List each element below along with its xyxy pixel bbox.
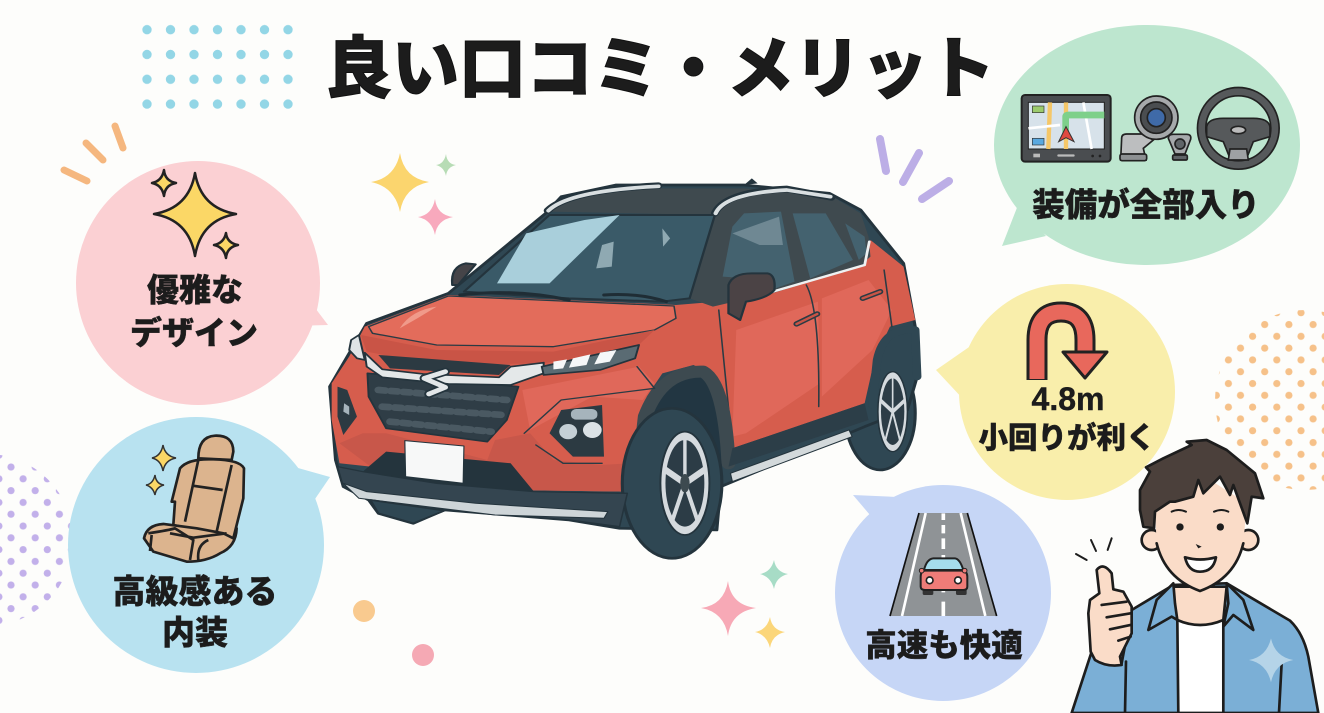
label: full equipment: 装備が全部入り	[1032, 186, 1260, 223]
jacket	[1072, 583, 1318, 713]
chest sparkle	[1249, 638, 1293, 682]
front rim	[660, 432, 709, 535]
hair	[1140, 440, 1263, 528]
jacket seams	[1125, 662, 1282, 713]
lower grille	[363, 452, 534, 492]
body highlights	[522, 280, 892, 437]
title: 良い口コミ・メリット	[325, 32, 995, 107]
front tyre	[622, 408, 722, 558]
panel: full equipment	[994, 25, 1300, 265]
sill	[728, 403, 869, 467]
emblem	[424, 372, 445, 394]
icon: U-turn arrow	[1037, 312, 1107, 380]
decorative dot: pink	[412, 644, 434, 666]
eyes	[1176, 523, 1224, 548]
eyebrows	[1172, 510, 1228, 512]
sparkles around car top	[371, 153, 456, 235]
burst lines: orange	[64, 126, 123, 181]
label: elegant design: 優雅な	[147, 272, 243, 308]
panel: tight turning	[936, 284, 1175, 500]
icon: gold sparkles	[152, 170, 238, 258]
collar	[1148, 583, 1177, 630]
label: elegant design: デザイン	[130, 315, 258, 351]
front bumper contour	[524, 367, 655, 463]
icon: small sparkles	[146, 445, 176, 495]
side windows	[723, 212, 795, 288]
decorative dot: orange	[353, 600, 375, 622]
mirrors	[452, 263, 476, 285]
upper grille slot	[378, 355, 511, 375]
label: luxurious interior: 高級感ある	[112, 573, 278, 610]
dot pattern: purple	[0, 454, 73, 626]
roof rails	[548, 186, 832, 213]
rear tyre	[845, 357, 915, 470]
lower bumper shade	[339, 433, 631, 492]
icon: dash camera	[1120, 96, 1191, 161]
ears	[1142, 530, 1162, 550]
face	[1155, 473, 1247, 591]
door lines and handles	[719, 270, 892, 447]
panel: elegant design	[76, 161, 328, 405]
wipers	[460, 293, 666, 302]
icon: steering wheel	[1202, 92, 1275, 165]
label: turning radius: 小回りが利く	[978, 421, 1156, 455]
chrome belt line	[758, 242, 869, 296]
icon: road with car	[890, 513, 997, 616]
burst lines: purple	[880, 139, 949, 199]
person giving thumbs up	[1072, 440, 1318, 713]
front left tyre	[371, 500, 444, 523]
spark marks	[1076, 538, 1112, 560]
icon: car seat	[144, 436, 244, 562]
headlight	[542, 345, 639, 375]
main grille	[367, 373, 518, 442]
dot pattern: orange	[1215, 310, 1324, 490]
label: turning radius: 4.8m	[1032, 381, 1104, 417]
left fog lamp	[338, 387, 357, 435]
licence plate	[405, 441, 464, 483]
hood lower red band	[361, 330, 655, 365]
chrome headlight bar and left lamp	[349, 335, 365, 360]
label: luxurious interior: 内装	[162, 614, 228, 651]
body silhouette	[330, 185, 919, 530]
fog lamp pod	[550, 405, 604, 457]
rear rim	[878, 372, 907, 452]
front wheel arch	[637, 372, 728, 487]
lower bumper	[338, 467, 627, 527]
label: comfortable highway: 高速も快適	[865, 627, 1023, 663]
windshield	[464, 215, 715, 302]
red body	[332, 240, 915, 492]
neck	[1173, 587, 1227, 625]
panel: luxurious interior	[68, 417, 330, 673]
mouth	[1185, 557, 1216, 572]
t-shirt	[1177, 620, 1223, 713]
panel: comfortable highway	[835, 485, 1051, 701]
hood	[369, 296, 676, 347]
icon: navigation monitor	[1022, 95, 1111, 162]
hand	[1088, 567, 1132, 666]
dot pattern: teal	[141, 24, 306, 123]
sparkles around car bottom	[701, 560, 788, 648]
roof	[550, 188, 870, 307]
car illustration	[330, 178, 919, 558]
rear arch	[872, 330, 917, 405]
